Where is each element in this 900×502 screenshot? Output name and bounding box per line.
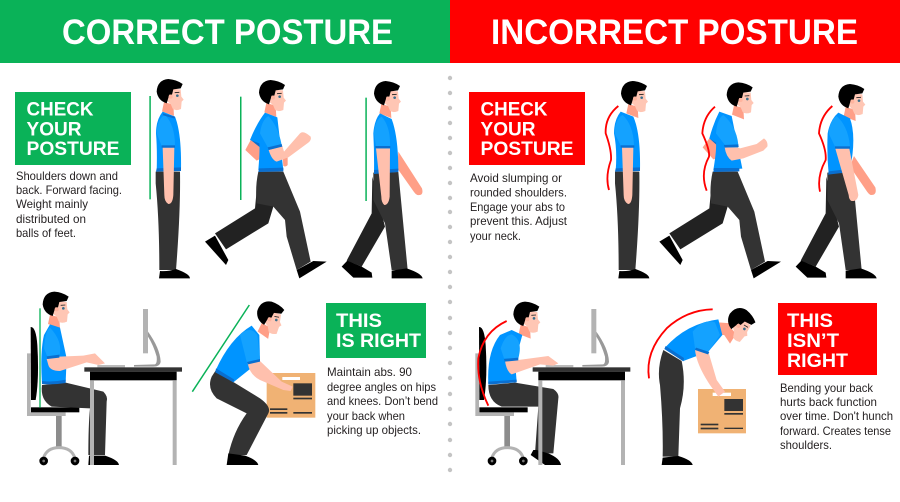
text: incorrect sitting advice (780, 381, 893, 452)
text: incorrect standing advice: rounded shoulders. (470, 186, 567, 200)
figure: incorrect bent-over lifting with box (648, 303, 759, 465)
callout: check your posture (green): POSTURE (26, 138, 120, 160)
figure: incorrect walking (796, 84, 877, 278)
callout: check your posture (green): YOUR (26, 118, 82, 140)
text: correct sitting advice: and knees. Don’t bend (327, 394, 438, 408)
callout: this is right: IS RIGHT (336, 330, 421, 352)
figure: correct standing (149, 79, 190, 278)
text: correct standing advice: distributed on (16, 212, 86, 226)
callout: check your posture (red): CHECK (480, 98, 548, 120)
text: incorrect sitting advice: Bending your back (780, 381, 874, 395)
text: incorrect standing advice: your neck. (470, 229, 521, 243)
text: correct standing advice: Shoulders down and (16, 169, 118, 183)
figure: incorrect slouched sitting (475, 302, 630, 465)
text: incorrect standing advice: prevent this. Adjust (470, 214, 568, 228)
callout: this isn't right (778, 303, 877, 375)
callout: check your posture (red): YOUR (480, 118, 536, 140)
text: correct sitting advice (327, 365, 438, 437)
callout: check your posture (green) (15, 92, 131, 165)
text: correct standing advice: balls of feet. (16, 226, 76, 240)
figure: incorrect standing (606, 81, 649, 278)
callout: this is right: THIS (336, 310, 382, 332)
text: correct standing advice: Weight mainly (16, 197, 88, 211)
header: correct posture (0, 0, 450, 63)
figure: correct walking (342, 81, 423, 278)
text: correct standing advice (16, 169, 122, 240)
text: correct sitting advice: degree angles on hips (327, 380, 436, 394)
text: incorrect sitting advice: hurts back function (780, 395, 877, 409)
header: incorrect posture: INCORRECT POSTURE (491, 12, 858, 52)
figure: correct sitting at desk (27, 292, 182, 465)
figure: correct striding (205, 80, 327, 278)
text: correct sitting advice: your back when (327, 409, 405, 423)
callout: this isn't right: RIGHT (787, 350, 848, 372)
callout: check your posture (red) (469, 92, 585, 165)
text: correct sitting advice: picking up objects. (327, 423, 421, 437)
header: correct posture: CORRECT POSTURE (62, 12, 393, 52)
text: incorrect standing advice (470, 171, 568, 243)
figure: incorrect striding (659, 82, 781, 278)
text: incorrect standing advice: Avoid slumping or (470, 171, 562, 185)
callout: check your posture (green): CHECK (26, 98, 94, 120)
text: incorrect sitting advice: forward. Creates tense (780, 424, 891, 438)
text: correct sitting advice: Maintain abs. 90 (327, 365, 412, 379)
figure: correct lifting with box (192, 299, 315, 465)
callout: this is right (326, 303, 426, 358)
callout: this isn't right: THIS (787, 310, 833, 332)
callout: this isn't right: ISN’T (787, 330, 839, 352)
callout: check your posture (red): POSTURE (480, 138, 574, 160)
text: incorrect sitting advice: over time. Don't hunch (780, 409, 893, 423)
text: correct standing advice: back. Forward facing. (16, 183, 122, 197)
text: incorrect sitting advice: shoulders. (780, 438, 832, 452)
text: incorrect standing advice: Engage your abs to (470, 200, 565, 214)
header: incorrect posture (450, 0, 900, 63)
